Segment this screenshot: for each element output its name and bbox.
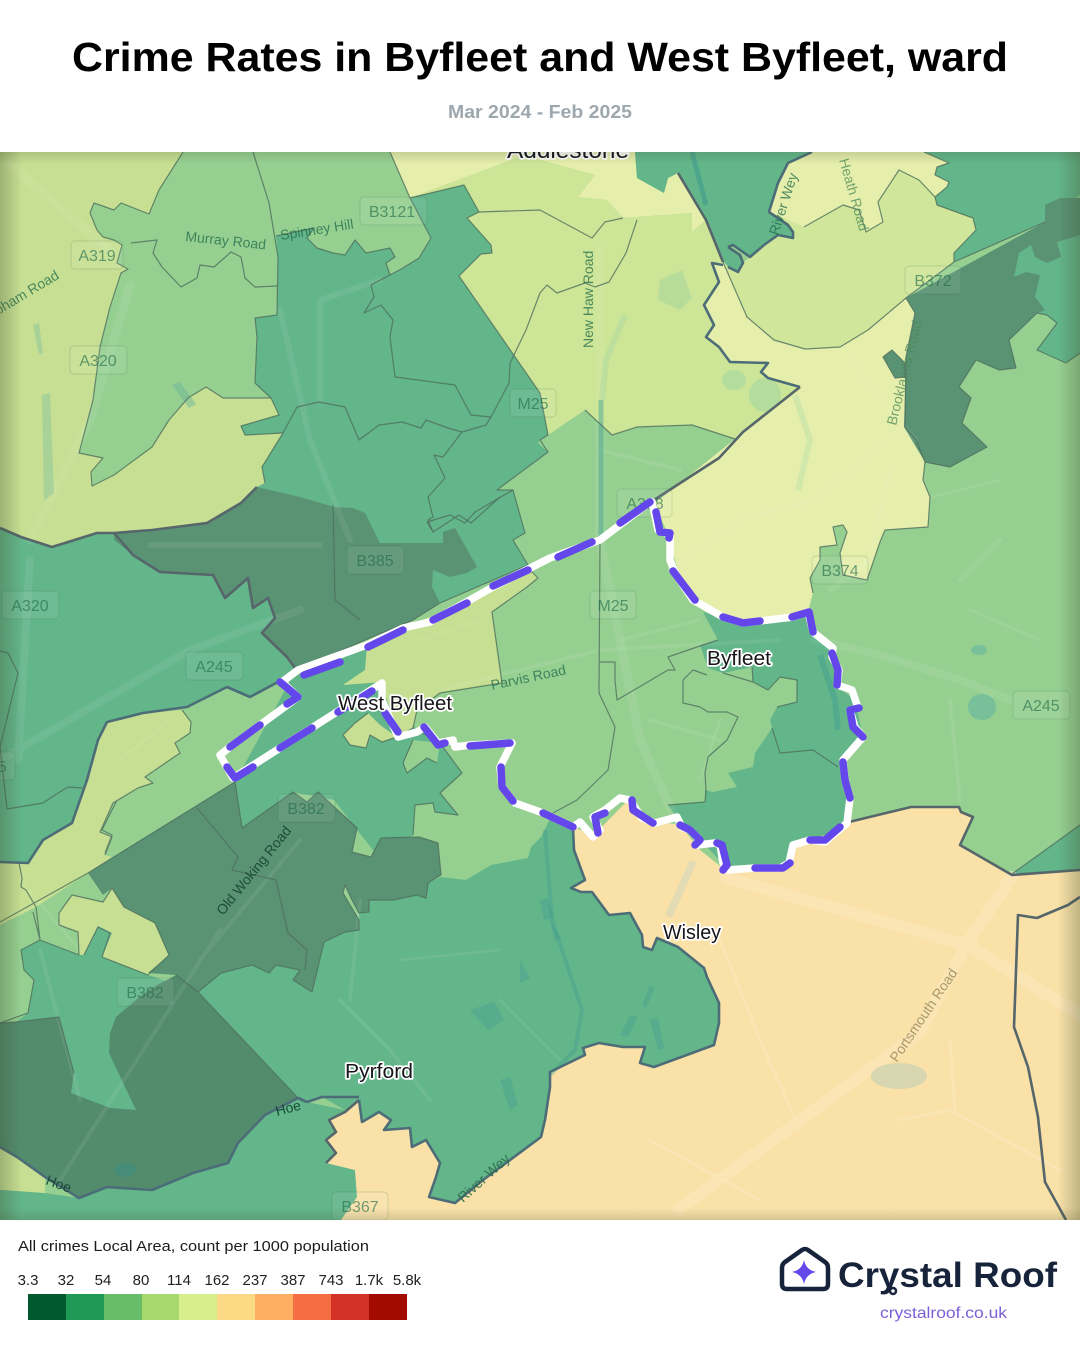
shield: B372: B372 bbox=[914, 273, 952, 290]
place labels: Wisley bbox=[663, 922, 721, 944]
shield: A245 west bbox=[186, 652, 243, 680]
ward boundary: Byfleet and West Byfleet bbox=[220, 502, 863, 870]
subtitle: date range: Mar 2024 - Feb 2025 bbox=[448, 102, 632, 122]
place labels: Byfleet bbox=[707, 648, 771, 670]
legend scale values: 3.3 bbox=[18, 1272, 38, 1289]
legend scale values: 1.7k bbox=[355, 1272, 384, 1289]
legend scale values: 237 bbox=[242, 1272, 268, 1289]
shield: A319 bbox=[71, 241, 123, 269]
shield: A320 north: A320 bbox=[79, 353, 117, 370]
legend scale values: 5.8k bbox=[393, 1272, 422, 1289]
road number shields bbox=[0, 197, 1070, 1220]
shield: B367: B367 bbox=[341, 1199, 379, 1216]
shield: B372 bbox=[905, 266, 961, 294]
legend scale values: 114 bbox=[167, 1272, 191, 1289]
legend title: All crimes Local Area, count per 1000 population bbox=[18, 1238, 369, 1255]
place labels: West Byfleet bbox=[338, 693, 452, 715]
shield: B374 bbox=[812, 556, 868, 584]
road name labels: Hoe bbox=[274, 1097, 303, 1119]
icon: house with star bbox=[782, 1249, 828, 1289]
shield: A318 bbox=[617, 489, 672, 517]
shield: A245 east: A245 bbox=[1022, 698, 1060, 715]
shield: A318: A318 bbox=[626, 496, 664, 513]
Crystal Roof logo bbox=[782, 1249, 1057, 1322]
area boundary lines bbox=[0, 152, 1080, 1220]
legend scale values: 80 bbox=[133, 1272, 149, 1289]
road name labels bbox=[0, 156, 960, 1205]
shield: B385: B385 bbox=[356, 553, 394, 570]
road name labels: Murray Road bbox=[185, 228, 267, 252]
shield: M25 south: M25 bbox=[597, 598, 629, 615]
shield: B385 bbox=[347, 546, 404, 574]
icon: keyhole tail on the y bbox=[890, 1288, 896, 1294]
shield: B3121: B3121 bbox=[369, 204, 415, 221]
title: Crime Rates in Byfleet and West Byfleet, ward bbox=[72, 34, 1008, 80]
legend bbox=[18, 1238, 422, 1320]
shield: M25 north: M25 bbox=[517, 396, 549, 413]
road name labels: Spinney Hill bbox=[279, 216, 354, 243]
shield: B367 bbox=[332, 1192, 388, 1220]
shield: B374: B374 bbox=[821, 563, 859, 580]
legend scale values: 162 bbox=[204, 1272, 230, 1289]
shield: A320 west: A320 bbox=[11, 598, 49, 615]
shield: B382 north bbox=[278, 794, 335, 822]
shield: A319: A319 bbox=[78, 248, 116, 265]
map edge vignette bbox=[0, 152, 1080, 1220]
road name labels: River Wey bbox=[766, 171, 801, 237]
road name labels: New Haw Road bbox=[580, 251, 596, 348]
road name labels: Parvis Road bbox=[489, 661, 567, 693]
road name labels: River Wey bbox=[454, 1150, 513, 1205]
shield: A245 east bbox=[1013, 691, 1070, 719]
road name labels: Old Woking Road bbox=[213, 823, 294, 918]
road name labels: Portsmouth Road bbox=[886, 965, 960, 1065]
road name labels: Heath Road bbox=[836, 156, 872, 233]
shield: B3121 bbox=[360, 197, 427, 225]
shield: B382 south: B382 bbox=[126, 985, 164, 1002]
shield: M25 south bbox=[590, 591, 636, 619]
place labels: Addlestone bbox=[507, 137, 629, 164]
shield: B382 north: B382 bbox=[287, 801, 325, 818]
shield: A245 edge bbox=[0, 752, 15, 780]
roads and land-use detail bbox=[0, 152, 1080, 1210]
map areas bbox=[0, 152, 1080, 1220]
legend scale values: 54 bbox=[95, 1272, 111, 1289]
legend scale values: 32 bbox=[58, 1272, 74, 1289]
legend scale values: 387 bbox=[280, 1272, 306, 1289]
shield: B382 south bbox=[117, 978, 174, 1006]
legend scale values: 743 bbox=[318, 1272, 344, 1289]
shield: A320 north bbox=[70, 346, 127, 374]
road name labels: Brooklands Road bbox=[883, 319, 925, 427]
shield: A320 west bbox=[2, 591, 59, 619]
legend colour swatches bbox=[28, 1294, 407, 1320]
legend scale values bbox=[18, 1272, 422, 1289]
shield: M25 north bbox=[510, 389, 556, 417]
place labels bbox=[338, 137, 771, 1083]
place labels: Pyrford bbox=[345, 1061, 413, 1083]
website: crystalroof.co.uk bbox=[880, 1305, 1008, 1322]
road name labels: Hoe bbox=[44, 1172, 74, 1196]
wordmark: Crystal Roof bbox=[838, 1256, 1057, 1295]
shield: A245 west: A245 bbox=[195, 659, 233, 676]
